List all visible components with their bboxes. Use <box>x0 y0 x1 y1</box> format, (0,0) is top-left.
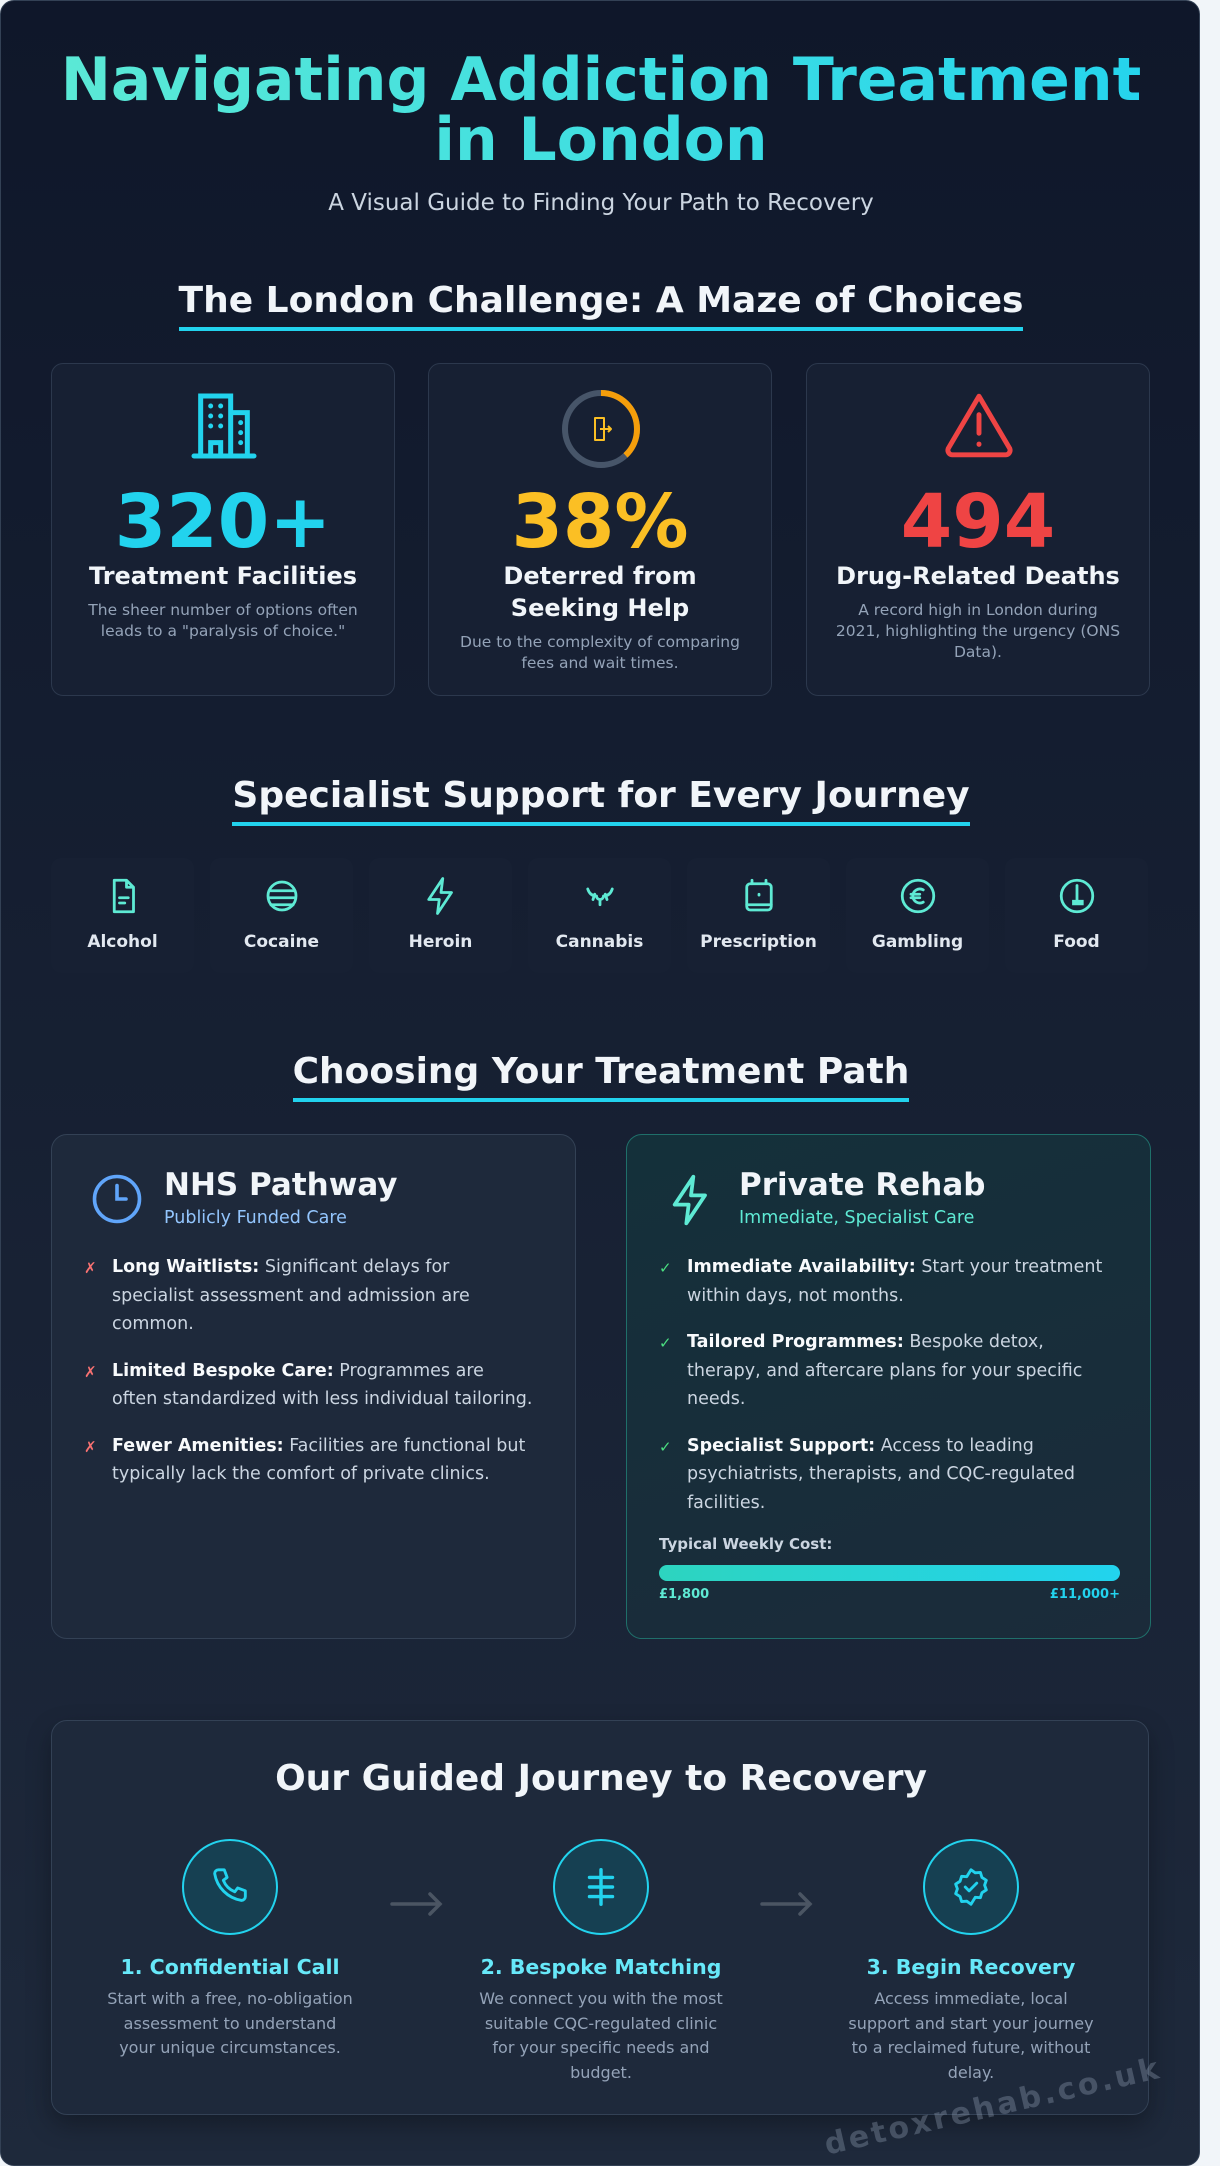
tile: Cocaine: Cocaine <box>244 932 319 952</box>
tile: Prescription <box>687 858 830 973</box>
list: benefits: therapy, and aftercare plans for your specific <box>687 1360 1082 1380</box>
icon: building <box>192 394 256 458</box>
panel: stat 320+ <box>51 363 395 696</box>
panel: stat 494 <box>806 363 1150 696</box>
label: Seeking Help <box>511 594 689 622</box>
icon: lightning <box>672 1174 707 1226</box>
number: 494 <box>901 479 1055 565</box>
number: 38% <box>511 479 689 565</box>
tile: Alcohol <box>51 858 194 973</box>
tile: Cocaine <box>210 858 353 973</box>
step 2: 2. Bespoke Matching <box>481 1955 721 1979</box>
list: drawbacks: Limited Bespoke Care: Programmes are <box>112 1360 484 1380</box>
step 1 <box>107 1839 353 2057</box>
list: drawbacks: Fewer Amenities: Facilities are functional but <box>112 1436 525 1456</box>
list: drawbacks: specialist assessment and admission are <box>112 1286 470 1306</box>
subheading: Publicly Funded Care <box>164 1208 347 1228</box>
panel: Private rehab <box>626 1134 1151 1639</box>
subheading: Immediate, Specialist Care <box>739 1208 974 1228</box>
description: A record high in London during 2021, highlighting the urgency (ONS Data). <box>836 601 1120 661</box>
tile: Food <box>1005 858 1148 973</box>
icon: matching <box>553 1839 649 1935</box>
heading: Specialist Support: Specialist Support for Every Journey <box>232 775 970 816</box>
list: benefits: psychiatrists, therapists, and CQC-regulated <box>687 1464 1075 1484</box>
step 2: We connect you with the most suitable CQC-regulated clinic for your specific needs and budget. <box>479 1989 723 2082</box>
tile: Alcohol: Alcohol <box>87 932 158 952</box>
cost bar: £1,800 <box>659 1587 709 1602</box>
tile: Gambling <box>846 858 989 973</box>
tile: Gambling: Gambling <box>872 932 963 952</box>
icon: ring chart <box>562 390 640 468</box>
subtitle: A Visual Guide to Finding Your Path to Recovery <box>328 190 874 216</box>
step 3: 3. Begin Recovery <box>867 1955 1075 1979</box>
tile: Heroin <box>369 858 512 973</box>
list: benefits: within days, not months. <box>687 1286 904 1306</box>
list: drawbacks: common. <box>112 1314 194 1334</box>
list: benefits: ✓ <box>659 1438 672 1456</box>
description: The sheer number of options often leads to a "paralysis of choice." <box>88 601 358 640</box>
list: benefits: ✓ <box>659 1334 672 1352</box>
list: drawbacks: often standardized with less individual tailoring. <box>112 1389 532 1409</box>
list: benefits: ✓ <box>659 1259 672 1277</box>
panel: stat 38% <box>428 363 772 696</box>
icon: phone <box>182 1839 278 1935</box>
list: drawbacks: ✗ <box>84 1438 97 1456</box>
icon: clock <box>92 1174 142 1224</box>
step 1: 1. Confidential Call <box>120 1955 340 1979</box>
tile: Cannabis: Cannabis <box>556 932 643 952</box>
list: benefits: Tailored Programmes: Bespoke detox, <box>687 1332 1044 1352</box>
tile: Cannabis <box>528 858 671 973</box>
tile: Food: Food <box>1053 932 1100 952</box>
list: drawbacks <box>84 1257 532 1484</box>
heading: NHS Pathway <box>164 1167 398 1203</box>
list: benefits: facilities. <box>687 1492 765 1512</box>
cost bar <box>659 1535 1120 1602</box>
heading: Private Rehab <box>739 1167 985 1203</box>
label: Drug-Related Deaths <box>836 562 1120 590</box>
icon: badge check <box>923 1839 1019 1935</box>
list: drawbacks: ✗ <box>84 1259 97 1277</box>
step 1: Start with a free, no-obligation assessment to understand your unique circumstances. <box>107 1989 353 2057</box>
tile: Heroin: Heroin <box>409 932 472 952</box>
arrow 2 <box>760 1892 812 1916</box>
list: benefits <box>659 1257 1102 1512</box>
list: drawbacks: typically lack the comfort of private clinics. <box>112 1464 490 1484</box>
list: benefits: Immediate Availability: Start your treatment <box>687 1257 1102 1277</box>
step 3 <box>848 1839 1094 2082</box>
cost bar: Typical Weekly Cost: <box>659 1535 832 1553</box>
list: benefits: needs. <box>687 1389 745 1409</box>
tile: Prescription: Prescription <box>700 932 817 952</box>
arrow 1 <box>390 1892 442 1916</box>
watermark: detoxrehab.co.uk <box>821 2051 1165 2163</box>
label: Deterred from <box>503 562 697 590</box>
label <box>503 562 697 622</box>
title: Navigating Addiction Treatment <box>61 45 1141 115</box>
title <box>1 50 1201 170</box>
heading: journey: Our Guided Journey to Recovery <box>275 1758 927 1799</box>
list: benefits: Specialist Support: Access to leading <box>687 1436 1034 1456</box>
icon: warning <box>945 394 1013 458</box>
panel: guided journey <box>51 1720 1149 2115</box>
list: drawbacks: Long Waitlists: Significant delays for <box>112 1257 449 1277</box>
description: Due to the complexity of comparing fees and wait times. <box>460 633 740 672</box>
step 2 <box>479 1839 723 2082</box>
step 3: Access immediate, local support and start your journey to a reclaimed future, without delay. <box>848 1989 1094 2082</box>
panel: NHS pathway <box>51 1134 576 1639</box>
heading: Treatment Path: Choosing Your Treatment Path <box>293 1051 909 1092</box>
heading: London Challenge: The London Challenge: A Maze of Choices <box>179 280 1023 321</box>
label: Treatment Facilities <box>89 562 357 590</box>
title: in London <box>434 105 768 175</box>
number: 320+ <box>115 479 331 565</box>
list: drawbacks: ✗ <box>84 1362 97 1380</box>
cost bar: £11,000+ <box>1050 1587 1120 1602</box>
